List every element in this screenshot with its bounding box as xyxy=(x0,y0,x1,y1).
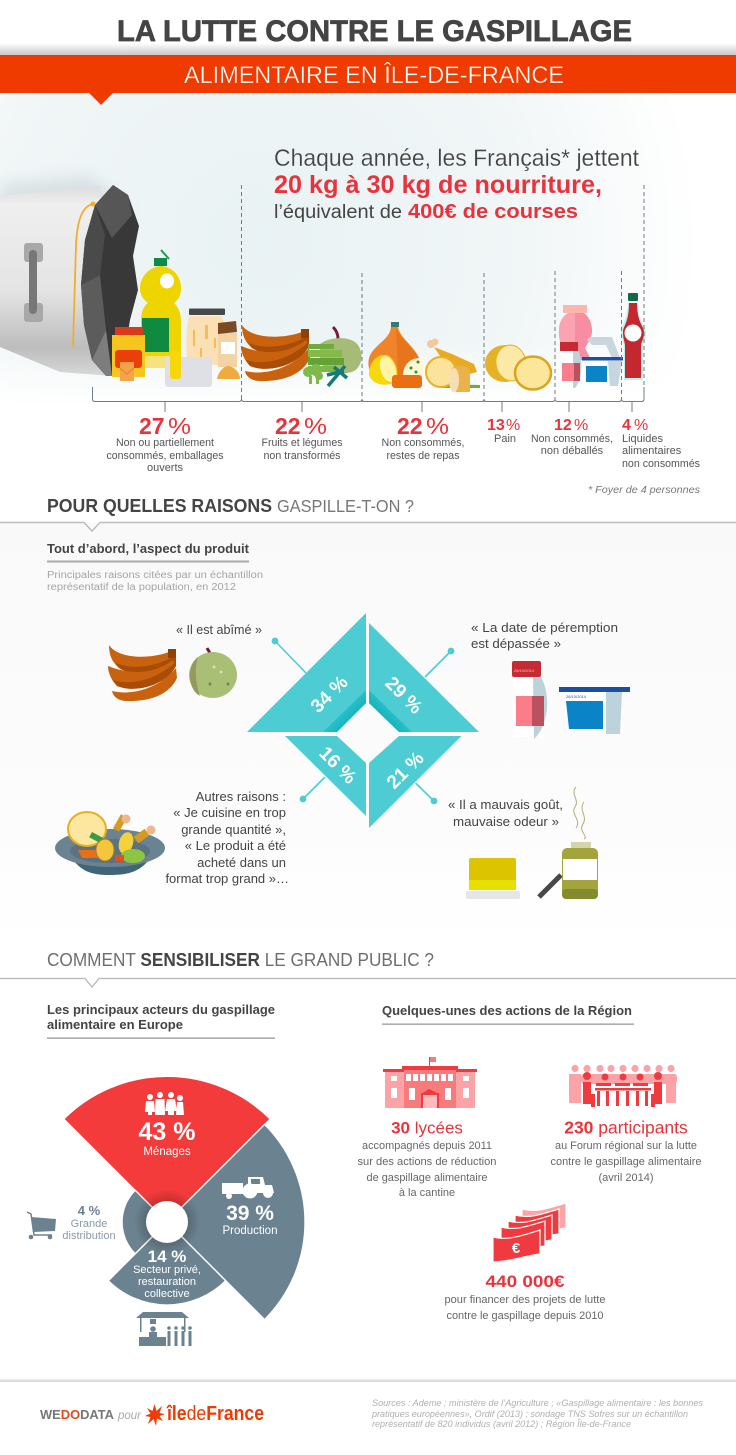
stat: 13%: % xyxy=(506,417,520,434)
quote: other reasons xyxy=(165,789,289,886)
header background shade xyxy=(0,43,736,55)
stat: 22% fruits: non transformés xyxy=(264,450,341,462)
stat: 440 000 euros xyxy=(444,1272,606,1322)
label: pour: pour xyxy=(117,1410,142,1422)
section heading: awareness: COMMENT SENSIBILISER LE GRAND PUBLIC ? xyxy=(47,950,434,970)
intro text: 400€ de courses xyxy=(408,200,578,223)
stat: 440 000 euros: 440 000€ xyxy=(486,1272,565,1291)
quote: expired: est dépassée » xyxy=(471,636,561,651)
stat: 12%: % xyxy=(574,417,588,434)
stat: 12% xyxy=(531,417,613,457)
quote: other reasons: « Je cuisine en trop xyxy=(173,805,286,820)
diamond chart: 21 % xyxy=(383,748,429,793)
stat: 4%: % xyxy=(634,417,648,434)
quote: bad smell: « Il a mauvais goût, xyxy=(448,797,563,812)
stat: 30 high schools: 30 lycées xyxy=(391,1118,463,1138)
stat: 27%: ouverts xyxy=(147,462,184,474)
quote: bad smell: mauvaise odeur » xyxy=(453,814,559,829)
footnote: * Foyer de 4 personnes xyxy=(588,485,700,496)
stat: retail: 4 % xyxy=(78,1203,101,1218)
caption xyxy=(47,570,263,593)
stat: households: 43 % xyxy=(139,1118,195,1146)
stat: 12%: 12 xyxy=(554,417,572,434)
stat: 22% leftovers xyxy=(382,413,464,462)
quote: damaged: « Il est abîmé » xyxy=(176,622,262,637)
stat: 22% leftovers: % xyxy=(426,413,449,439)
icon: sauce bottle xyxy=(621,293,646,380)
subheading xyxy=(47,1002,275,1039)
stat: retail: Grande xyxy=(71,1218,107,1230)
stat: 22% fruits: Fruits et légumes xyxy=(262,437,343,449)
icon: tractor xyxy=(222,1177,274,1199)
stat: 27% xyxy=(106,413,224,474)
section divider with notch xyxy=(0,978,736,987)
subheading: Tout d’abord, l’aspect du produit xyxy=(47,542,250,556)
sources xyxy=(371,1398,703,1430)
logo: WeDoData: WEDODATA xyxy=(40,1408,114,1422)
intro text: 20 kg à 30 kg de nourriture, xyxy=(274,171,602,199)
dashed separators xyxy=(242,185,644,402)
diamond chart: 29 % xyxy=(381,673,426,719)
stat: 4%: alimentaires xyxy=(622,445,682,457)
stat: private sector xyxy=(133,1247,201,1300)
sources: Sources : Ademe ; ministère de l’Agriculture ; «Gaspillage alimentaire : les bonnes xyxy=(372,1398,703,1409)
stat: private sector: collective xyxy=(144,1288,190,1300)
logo: Île-de-France wordmark: îledeFrance xyxy=(166,1403,264,1425)
icon: shopping cart xyxy=(27,1212,56,1239)
stat: private sector: Secteur privé, xyxy=(133,1264,201,1276)
stat: 27%: Non ou partiellement xyxy=(116,437,214,449)
icon: expired products: 26/10/2014 xyxy=(566,694,587,699)
stat: 13%: Pain xyxy=(494,433,516,445)
stat: 12%: Non consommés, xyxy=(531,433,613,445)
quote: expired: « La date de péremption xyxy=(471,620,618,635)
stat: 22% fruits xyxy=(262,413,343,462)
stat: 30 high schools xyxy=(358,1118,496,1199)
icon: market stall xyxy=(136,1312,192,1346)
stat: 30 high schools: de gaspillage alimentaire xyxy=(366,1172,488,1184)
quote: other reasons: « Le produit a été xyxy=(185,838,286,853)
chart: radial sectors xyxy=(64,1076,305,1320)
diamond chart: 16 % xyxy=(315,743,360,789)
icon: family xyxy=(145,1092,184,1115)
icon: plate of food xyxy=(55,812,165,875)
stat: 230 participants: 230 participants xyxy=(564,1118,688,1138)
stat: 4%: 4 xyxy=(622,417,631,434)
stat: production: 39 % xyxy=(226,1202,274,1225)
section heading: reasons xyxy=(47,496,414,516)
stat: private sector: restauration xyxy=(138,1276,196,1288)
stat: 13% xyxy=(487,417,520,445)
footer xyxy=(0,1380,736,1430)
stat: 230 participants: au Forum régional sur la lutte xyxy=(555,1140,697,1152)
quote: other reasons: format trop grand »… xyxy=(165,871,289,886)
icon: trash bag xyxy=(0,176,139,376)
stat: households: Ménages xyxy=(143,1146,191,1158)
intro text: Chaque année, les Français* jettent xyxy=(274,145,639,172)
icon: fruits and vegetables xyxy=(241,325,361,386)
panel: actors of food waste xyxy=(27,1002,305,1346)
stat: 30 high schools: à la cantine xyxy=(399,1187,455,1199)
intro text xyxy=(274,145,639,223)
quote: other reasons: acheté dans un xyxy=(197,855,286,870)
diamond chart xyxy=(247,613,479,828)
icon: high school xyxy=(383,1057,477,1108)
icon: spoiled food xyxy=(466,787,598,899)
stat: 4% xyxy=(622,417,700,470)
caption: représentatif de la population, en 2012 xyxy=(47,582,236,593)
icon: leftovers xyxy=(368,322,480,392)
caption: Principales raisons citées par un échantillon xyxy=(47,570,263,581)
stat: 27%: % xyxy=(168,413,191,439)
diamond chart: 34 % xyxy=(307,672,353,717)
logo: Île-de-France star xyxy=(145,1404,165,1426)
panel: food waste breakdown xyxy=(0,93,736,496)
icon: euro banknotes xyxy=(493,1203,566,1262)
sources: pratiques européennes», Ordif (2013) ; sondage TNS Sofres sur un échantillon xyxy=(371,1409,688,1420)
stat: 440 000 euros: contre le gaspillage depuis 2010 xyxy=(446,1310,604,1322)
brackets xyxy=(92,387,644,412)
subheading: alimentaire en Europe xyxy=(47,1017,183,1032)
sources: représentatif de 820 individus (avril 2012) ; Région Île-de-France xyxy=(372,1419,631,1430)
icon: packaged goods unopened xyxy=(559,305,623,388)
subheading: Quelques-unes des actions de la Région xyxy=(382,1003,632,1018)
panel: regional actions xyxy=(358,1003,702,1322)
icon: bread xyxy=(485,343,551,390)
subtitle banner xyxy=(0,55,736,105)
quote: bad smell xyxy=(448,797,563,829)
quote: other reasons: Autres raisons : xyxy=(196,789,286,804)
stat: 22% leftovers: restes de repas xyxy=(386,450,460,462)
icon: forum participants xyxy=(569,1065,677,1107)
icon: euro banknotes: € xyxy=(512,1240,521,1257)
icon: damaged fruit xyxy=(108,645,237,701)
stat: 4%: non consommés xyxy=(622,458,700,470)
stat: 4%: Liquides xyxy=(622,433,663,445)
icon: expired products: 26/10/2014 xyxy=(514,668,535,673)
icon: expired products xyxy=(512,661,630,739)
stat: private sector: 14 % xyxy=(148,1247,186,1266)
stat: 12%: non déballés xyxy=(541,445,604,457)
section heading: reasons: POUR QUELLES RAISONS xyxy=(47,496,272,516)
stat: 27%: consommés, emballages xyxy=(106,450,224,462)
stat: production xyxy=(223,1202,277,1237)
stat: production: Production xyxy=(223,1225,277,1237)
subtitle banner: ALIMENTAIRE EN ÎLE-DE-FRANCE xyxy=(184,62,564,89)
stat: 440 000 euros: pour financer des projets de lutte xyxy=(444,1294,606,1306)
stat: 30 high schools: accompagnés depuis 2011 xyxy=(362,1140,492,1152)
title: LA LUTTE CONTRE LE GASPILLAGE xyxy=(117,15,632,48)
panel: reasons xyxy=(0,522,736,943)
stat: 22% fruits: % xyxy=(304,413,327,439)
stat: retail xyxy=(62,1203,116,1242)
stat: 230 participants xyxy=(550,1118,702,1184)
section divider with notch xyxy=(0,522,736,531)
icon: packaged food xyxy=(112,250,240,387)
stat: 22% leftovers: 22 xyxy=(397,413,423,439)
stat: 22% leftovers: Non consommés, xyxy=(382,437,464,449)
section heading: reasons: GASPILLE-T-ON ? xyxy=(277,496,414,516)
quote: expired xyxy=(471,620,618,651)
stat: 22% fruits: 22 xyxy=(275,413,301,439)
stat: retail: distribution xyxy=(62,1230,116,1242)
stat: 230 participants: contre le gaspillage alimentaire xyxy=(550,1156,702,1168)
stat: 230 participants: (avril 2014) xyxy=(598,1172,654,1184)
stat: 27%: 27 xyxy=(139,413,165,439)
intro text: l’équivalent de xyxy=(274,202,402,223)
quote: other reasons: grande quantité », xyxy=(181,822,286,837)
stat: 13%: 13 xyxy=(487,417,505,434)
stat: 30 high schools: sur des actions de réduction xyxy=(358,1156,496,1168)
subheading: Les principaux acteurs du gaspillage xyxy=(47,1002,275,1017)
